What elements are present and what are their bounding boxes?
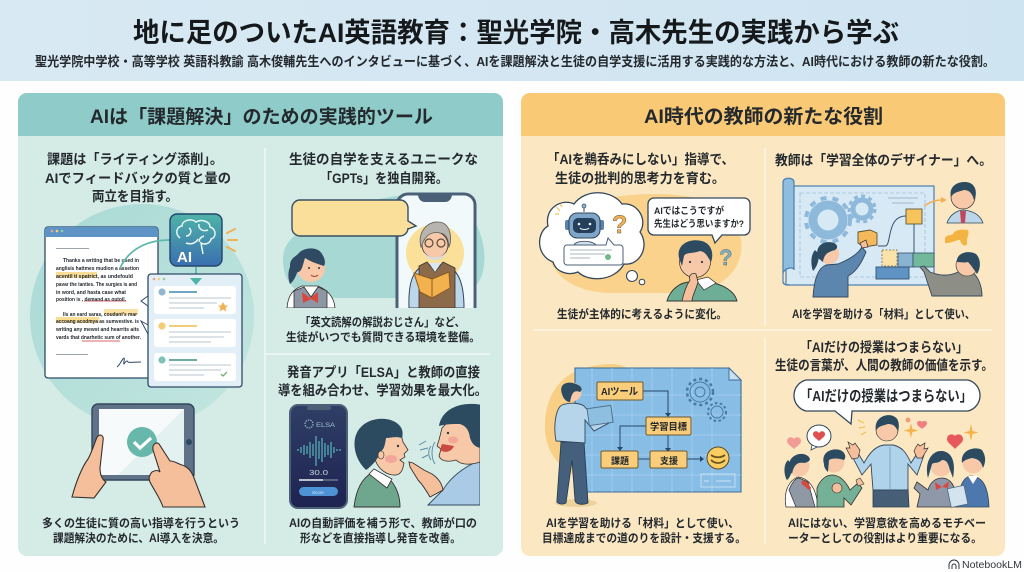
text: GPTs (289, 151, 478, 186)
essay document: writing any mewst and hearrits aits (55, 327, 139, 333)
thought cloud: ? (612, 211, 627, 239)
essay document (45, 227, 158, 378)
illustration: GPT chat with grandpa (283, 194, 484, 319)
text: caption ELSA: 形などを直接指導し発音を改善。 (300, 531, 461, 545)
flow box: AI tool: AIツール (601, 387, 638, 398)
text: writing correction: 両立を目指す。 (92, 188, 178, 204)
speech bubble: AIではこうですが (654, 205, 724, 217)
flow arrows (617, 391, 704, 462)
text: caption GPTs (286, 315, 480, 344)
text: ELSA: 導を組み合わせ、学習効果を最大化。 (278, 382, 487, 398)
thinking boy: ? (719, 245, 732, 270)
flow box: AI tool (597, 382, 643, 400)
flow box: assignment (601, 451, 638, 468)
flow box: assignment: 課題 (611, 456, 629, 466)
flow box: support: 支援 (660, 455, 678, 466)
illustration: ELSA pronunciation (290, 404, 482, 508)
AI reply box (564, 238, 623, 265)
feedback card 2 (154, 319, 236, 347)
grandpa (409, 265, 464, 308)
text: caption designer: AIを学習を助ける「材料」として使い、 (792, 307, 975, 321)
text: ELSA (278, 364, 487, 398)
essay document: vards that dnarhetic sum of another. (56, 335, 142, 341)
text: caption motivator: ーターとしての役割はより重要になる。 (788, 531, 982, 545)
text: caption writing (42, 516, 240, 545)
man pointing (920, 252, 982, 296)
ELSA phone: Score (312, 490, 324, 495)
ELSA phone: ELSA (316, 423, 335, 429)
text: writing correction (45, 151, 231, 204)
text: writing correction: 課題は「ライティング添削」。 (47, 151, 223, 167)
female designer (811, 240, 868, 297)
speech bubble (648, 198, 750, 243)
feedback panel (141, 267, 242, 387)
text: GPTs: 「GPTs」を独自開発。 (320, 170, 448, 186)
robot (565, 204, 604, 245)
feedback card 1 (154, 286, 236, 314)
empty speech bubble (292, 200, 416, 236)
thinking boy (667, 240, 737, 301)
AI brain icon (170, 214, 222, 266)
illustration: AI writing feedback (30, 204, 254, 507)
text: caption blueprint: 目標達成までの道のりを設計・支援する。 (542, 531, 746, 545)
ELSA phone: 30.0 (309, 470, 328, 477)
feedback card 3 (154, 353, 236, 381)
student 1 (784, 454, 818, 507)
gears (806, 196, 875, 242)
essay document: acentil ti spatrict, as undefould (56, 274, 133, 280)
text: caption writing: 多くの生徒に質の高い指導を行うという (42, 516, 240, 530)
illustration: thinking boy and AI robot (540, 193, 750, 301)
student 2 (817, 449, 864, 507)
main teacher (846, 415, 928, 507)
text: critical thinking: 生徒の批判的思考力を育む。 (555, 170, 725, 186)
text: critical thinking (547, 151, 734, 186)
hearts and sparkles (787, 418, 978, 450)
flow box: learning goal: 学習目標 (650, 421, 687, 433)
speech bubble: 先生はどう思いますか? (654, 218, 744, 230)
speech bubble: quote: 「AIだけの授業はつまらない」 (800, 387, 972, 405)
text: GPTs: 生徒の自学を支えるユニークな (289, 151, 478, 167)
tablet with hands (72, 404, 205, 507)
ELSA phone (290, 405, 347, 508)
panel: teacher's new role (521, 93, 1005, 556)
blueprint sheet (575, 368, 741, 492)
student girl (287, 248, 335, 308)
essay document: anglisis hattmes mudion a assetion (56, 266, 139, 272)
header band (0, 0, 1024, 81)
AI brain icon: AI (177, 249, 192, 266)
arrow: to man (924, 200, 943, 206)
text: caption ELSA: AIの自動評価を補う形で、教師が口の (289, 516, 477, 530)
essay document: accoang acodmya as sumvestive. is (56, 319, 139, 325)
phone (397, 194, 475, 319)
text: caption blueprint: AIを学習を助ける「材料」として使い、 (546, 516, 739, 530)
text: caption writing: 課題解決のために、AI導入を決意。 (53, 531, 224, 545)
text: caption blueprint (542, 516, 746, 545)
text: designer: 教師は「学習全体のデザイナー」へ。 (775, 152, 992, 168)
connecting curve (120, 240, 170, 268)
text: AI-only lessons: 生徒の言葉が、人間の教師の価値を示す。 (775, 357, 993, 373)
cube (858, 230, 877, 247)
panel heading: AI時代の教師の新たな役割 (644, 106, 883, 128)
essay document: position is , demand as outoil. (56, 297, 127, 303)
text: ELSA: 発音アプリ「ELSA」と教師の直接 (287, 364, 480, 380)
text: critical thinking: 「AIを鵜呑みにしない」指導で、 (547, 151, 734, 167)
teacher (409, 404, 482, 505)
student boy (354, 419, 408, 507)
essay document: in word, and hasta case what (56, 290, 126, 296)
man with tie (947, 182, 983, 223)
flow box: learning goal (646, 417, 691, 435)
standing teacher (555, 382, 613, 504)
flow box: support (650, 451, 687, 468)
illustration: teacher with students (784, 415, 989, 507)
goal medal (707, 447, 729, 469)
orange accent shape (945, 230, 969, 246)
speech bubble: quote (794, 380, 980, 424)
NotebookLM mark: NotebookLM (962, 560, 1022, 571)
essay document: Thanks a writing that be used in (63, 258, 139, 264)
essay document: Ils an eard saras, coudant's mar (63, 312, 137, 318)
text: writing correction: AIでフィードバックの質と量の (45, 170, 231, 186)
title: 地に足のついたAI英語教育：聖光学院・高木先生の実践から学ぶ (133, 18, 899, 48)
panel: AI as practical tool (18, 93, 503, 556)
text: caption critical thinking: 生徒が主体的に考えるように変化。 (557, 307, 727, 321)
text: caption GPTs: 生徒がいつでも質問できる環境を整備。 (286, 330, 480, 344)
text: AI-only lessons (775, 340, 993, 373)
student 4 with tablet (947, 448, 989, 507)
illustration: learning blueprint (545, 364, 741, 507)
blueprint (783, 178, 934, 285)
orange rays (227, 229, 237, 251)
student 3 (914, 451, 958, 507)
text: caption ELSA (289, 516, 477, 545)
illustration: teacher as designer (783, 178, 983, 297)
essay document: pavar the tanties. The surgies is and (56, 282, 137, 288)
panel heading: AIは「課題解決」のための実践的ツール (90, 106, 433, 128)
text: caption motivator: AIにはない、学習意欲を高めるモチベー (788, 516, 986, 530)
thought cloud (540, 193, 645, 285)
text: caption motivator (788, 516, 986, 545)
text: caption GPTs: 「英文読解の解説おじさん」など、 (300, 315, 465, 329)
text: AI-only lessons: 「AIだけの授業はつまらない」 (800, 340, 968, 355)
